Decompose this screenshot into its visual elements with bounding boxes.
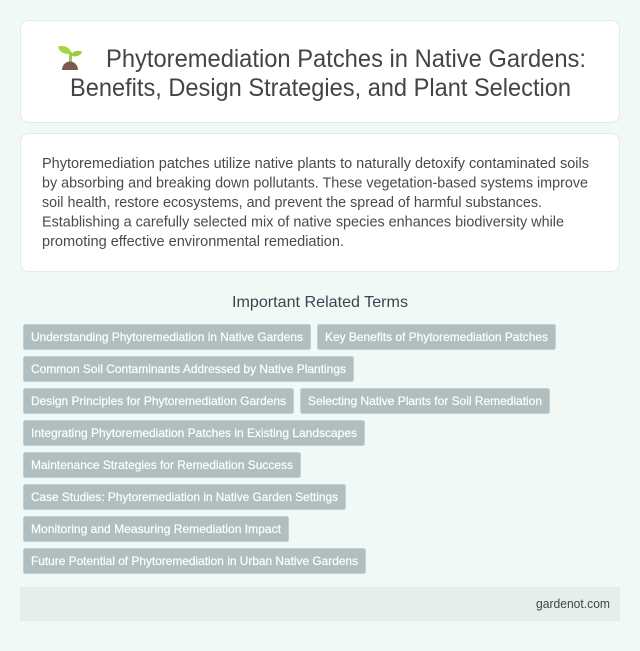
title	[70, 45, 586, 102]
term tags	[24, 324, 556, 574]
tag: case studies	[24, 484, 346, 510]
icon: sprout	[58, 46, 82, 70]
title: Benefits, Design Strategies, and Plant Selection	[70, 74, 571, 102]
tag: maintenance: Maintenance Strategies for Remediation Success	[31, 458, 293, 472]
panel: intro text card: by absorbing and breaking down pollutants. These vegetation-based systems improve	[42, 176, 588, 192]
tag: case studies: Case Studies: Phytoremediation in Native Garden Settings	[31, 490, 338, 504]
tag: design principles: Design Principles for Phytoremediation Gardens	[31, 394, 286, 408]
heading: related terms: Important Related Terms	[232, 294, 408, 311]
tag: understanding: Understanding Phytoremediation in Native Gardens	[31, 330, 303, 344]
footer: gardenot.com	[536, 596, 610, 611]
tag: understanding	[24, 324, 310, 350]
tag: soil contaminants: Common Soil Contaminants Addressed by Native Plantings	[31, 362, 346, 376]
panel: intro text card: soil health, restore ecosystems, and prevent the spread of harmful substances.	[42, 195, 542, 211]
tag: monitoring	[24, 516, 288, 542]
panel: intro text card: Establishing a carefully selected mix of native species enhances biodiversity while	[42, 214, 564, 230]
tag: future potential: Future Potential of Phytoremediation in Urban Native Gardens	[31, 554, 358, 568]
tag: integrating patches: Integrating Phytoremediation Patches in Existing Landscapes	[31, 426, 357, 440]
tag: soil contaminants	[24, 356, 354, 382]
tag: integrating patches	[24, 420, 364, 446]
tag: selecting native plants: Selecting Native Plants for Soil Remediation	[308, 394, 542, 408]
panel: intro text card: Phytoremediation patches utilize native plants to naturally detoxify contaminated soils	[42, 156, 589, 172]
panel: title card	[20, 20, 620, 122]
panel: intro text card	[20, 134, 620, 272]
tag: key benefits	[318, 324, 556, 350]
tag: maintenance	[24, 452, 300, 478]
tag: future potential	[24, 548, 366, 574]
footer	[20, 587, 620, 621]
tag: monitoring: Monitoring and Measuring Remediation Impact	[31, 522, 282, 536]
tag: design principles	[24, 388, 294, 414]
panel: intro text card: promoting effective environmental remediation.	[42, 234, 344, 250]
tag: key benefits: Key Benefits of Phytoremediation Patches	[325, 330, 548, 344]
tag: selecting native plants	[300, 388, 550, 414]
title: Phytoremediation Patches in Native Gardens:	[106, 45, 586, 73]
